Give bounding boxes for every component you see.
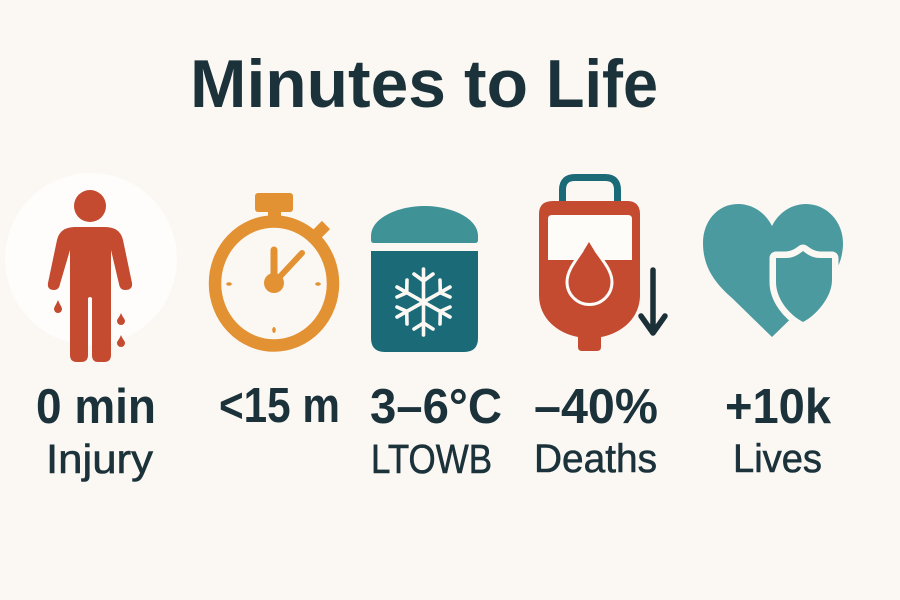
stat: -40% Deaths: –40%	[534, 380, 658, 434]
stat: 3-6 C LTOWB	[370, 380, 502, 482]
title: Life	[546, 46, 658, 122]
icon: stopwatch	[215, 193, 333, 346]
stat: -40% Deaths: Deaths	[534, 437, 657, 481]
stat: -40% Deaths	[534, 380, 658, 481]
icon: down arrow	[641, 270, 665, 333]
stat: +10k Lives	[725, 380, 832, 481]
title: to	[464, 46, 528, 122]
stat: 0 min Injury: Injury	[46, 436, 154, 482]
stat: 0 min Injury: 0 min	[36, 380, 156, 434]
stat: 3-6 C LTOWB: LTOWB	[371, 436, 492, 482]
icon: blood bag	[539, 178, 665, 351]
stat: +10k Lives: Lives	[733, 437, 822, 481]
icon: injured person	[5, 173, 177, 362]
stat: 0 min Injury	[36, 380, 156, 482]
title: Minutes	[190, 46, 446, 122]
title	[190, 46, 658, 122]
icon: heart with shield	[703, 204, 843, 337]
icon: cold storage box	[371, 206, 478, 352]
stat: under 15 minutes: <15 m	[219, 379, 340, 433]
stat: +10k Lives: +10k	[725, 380, 832, 434]
stat: 3-6 C LTOWB: 3–6°C	[370, 380, 502, 434]
